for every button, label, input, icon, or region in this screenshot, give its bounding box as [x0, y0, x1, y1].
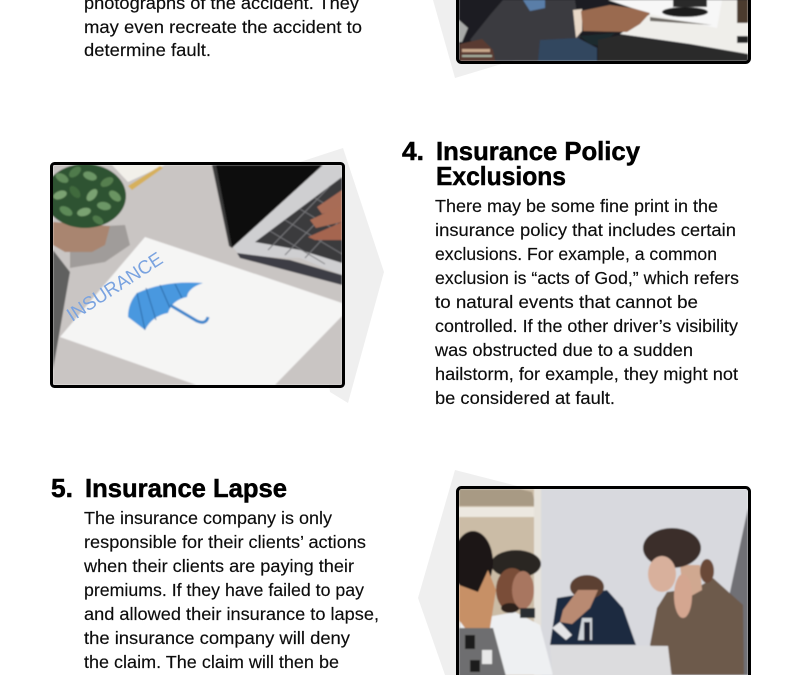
text block: step 3 ending: may even recreate the accident to — [84, 17, 362, 37]
text block: step 4 body — [434, 196, 739, 408]
text block: step 5 body: and allowed their insurance to lapse, — [84, 604, 379, 624]
text block: step 4 body: hailstorm, for example, they might not — [435, 364, 738, 384]
text block: step 4 body: insurance policy that includes certain — [435, 220, 736, 240]
text block: step 5 body: the insurance company will deny — [84, 628, 350, 648]
text block: step 4 body: to natural events that cannot be — [435, 292, 698, 312]
photo: people reviewing a document — [458, 0, 750, 62]
text block: step 4 body: was obstructed due to a sudden — [434, 340, 693, 360]
text block: step 4 body: exclusion is “acts of God,” which refers — [435, 268, 739, 288]
backdrop shape: step 4 photo — [300, 148, 384, 403]
photo: insurance paper with umbrella and laptop — [44, 164, 344, 388]
backdrop shape: step 5 photo — [418, 470, 525, 675]
text block: step 4 body: be considered at fault. — [435, 388, 615, 408]
text block: step 5 body: The insurance company is only — [84, 508, 332, 528]
text block: step 5 body: the claim. The claim will then be — [84, 652, 339, 672]
photo: insurance paper with umbrella and laptop: INSURANCE — [63, 249, 167, 326]
step 4 heading: 4. — [402, 136, 424, 166]
text block: step 3 ending: determine fault. — [84, 40, 211, 60]
step 4 heading: Insurance Policy — [436, 136, 641, 166]
text block: step 5 body: premiums. If they have failed to pay — [84, 580, 364, 600]
step 5 heading: 5. — [51, 473, 73, 503]
text block: step 5 body: when their clients are paying their — [83, 556, 354, 576]
text block: step 4 body: controlled. If the other driver’s visibility — [435, 316, 738, 336]
step 4 heading: Exclusions — [436, 161, 566, 191]
text block: step 5 body: responsible for their clients’ actions — [84, 532, 366, 552]
photo: three stressed colleagues at a laptop — [453, 488, 750, 675]
text block: step 5 body — [83, 508, 379, 672]
step 4 heading — [402, 136, 641, 191]
step 5 heading: Insurance Lapse — [85, 473, 287, 503]
text block: step 4 body: There may be some fine print in the — [435, 196, 718, 216]
text block: step 3 ending — [84, 0, 362, 60]
backdrop shape: step 3 photo — [433, 0, 515, 78]
text block: step 4 body: exclusions. For example, a common — [435, 244, 717, 264]
